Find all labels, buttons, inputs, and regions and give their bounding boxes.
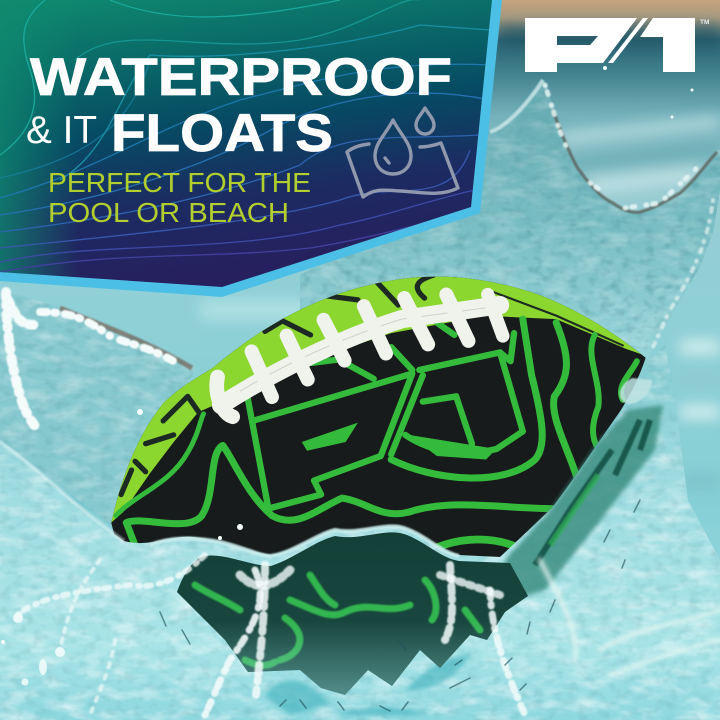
P logo inner bar (302, 423, 358, 451)
foreground water (0, 340, 720, 720)
logo: P/1 (525, 18, 709, 72)
right crown sheet (290, 70, 720, 370)
dark flecks in the splash (160, 500, 640, 711)
dark marks on lime panel (121, 275, 623, 495)
green reflection strip at ball's right side (505, 405, 663, 600)
water crown: back splash (0, 70, 720, 545)
white laces (217, 295, 503, 417)
right crown rim (490, 80, 543, 132)
glass waterline highlight (150, 526, 459, 556)
blurred streaks behind the crown (40, 117, 720, 550)
lower-left lip of the splash (0, 442, 124, 541)
title: FLOATS: FLOATS (111, 104, 333, 163)
subtitle line 1: PERFECT FOR THE (48, 167, 311, 198)
title: WATERPROOF: WATERPROOF (30, 48, 452, 107)
football (111, 276, 646, 557)
subtitle line 2: POOL OR BEACH (48, 197, 289, 228)
submerged part of the ball (150, 525, 535, 700)
ball body (100, 270, 661, 565)
left crown rim (60, 308, 192, 368)
banner: headline panel (0, 0, 502, 297)
deep teal patches near bottom (265, 655, 470, 715)
banner fill (0, 0, 492, 287)
icon: water drops on fabric (347, 108, 458, 197)
pale highlights, lower right (540, 560, 720, 675)
left crown sheet (0, 295, 195, 526)
trademark: TM (700, 19, 709, 26)
banner border (0, 0, 502, 297)
water splash streaks (18, 555, 525, 715)
title: & IT: & IT (26, 109, 97, 152)
lime top panel (100, 266, 651, 526)
green contour lines (116, 319, 637, 549)
